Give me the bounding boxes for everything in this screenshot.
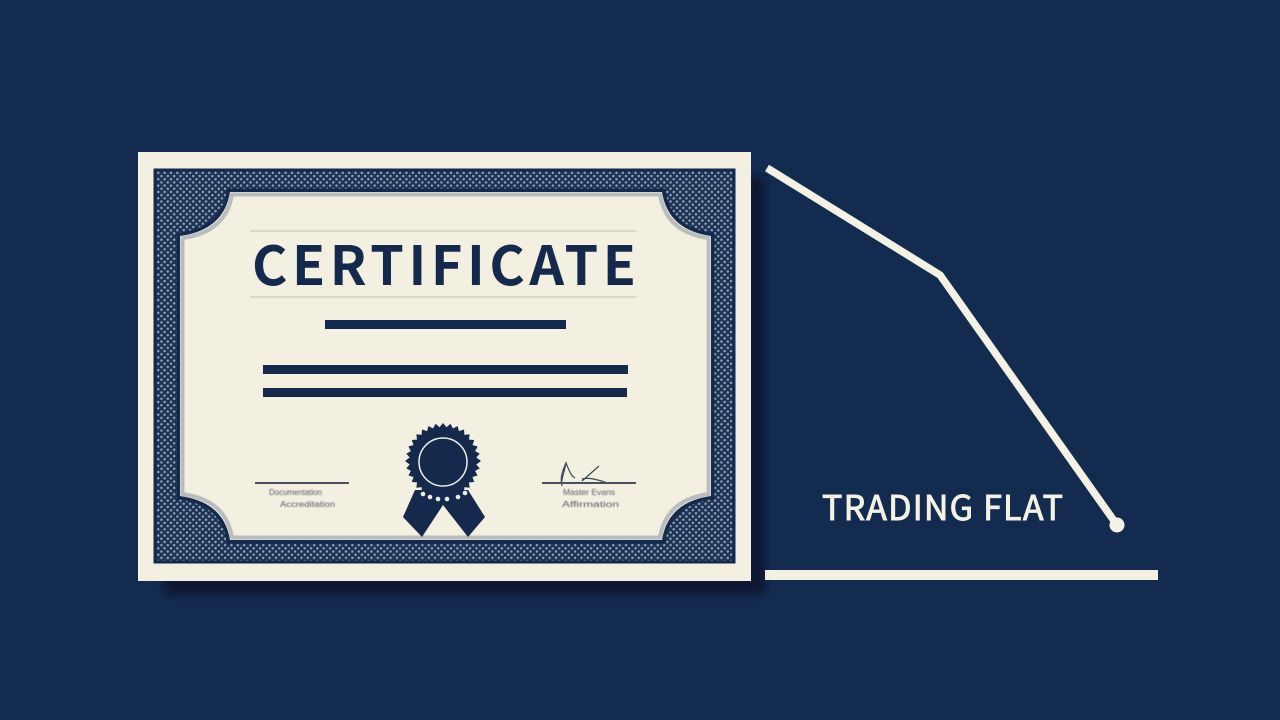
label: trading flat: TRADING FLAT — [822, 481, 1063, 530]
title rule top — [250, 230, 636, 232]
title: CERTIFICATE — [252, 222, 636, 301]
detail line 1 — [263, 365, 628, 374]
right signature block: Affirmation — [562, 500, 619, 509]
left signature block: Documentation — [269, 488, 322, 497]
detail line 2 — [263, 388, 627, 397]
certificate paper — [138, 152, 751, 581]
ribbon seal — [403, 423, 485, 537]
right signature block — [542, 463, 636, 509]
left signature block — [255, 482, 349, 509]
certificate — [138, 152, 751, 581]
right signature block: Master Evans — [563, 488, 615, 497]
flat baseline — [765, 570, 1158, 580]
chart: trading flat decline — [765, 168, 1158, 580]
name line — [325, 320, 566, 329]
certificate shadow — [165, 178, 765, 594]
seal inner ring — [419, 438, 467, 486]
seal rosette — [405, 423, 481, 499]
patterned border — [154, 169, 735, 563]
decline line — [767, 168, 1117, 525]
seal beads — [421, 491, 467, 501]
inner panel — [180, 192, 711, 540]
left signature block: Accreditation — [280, 500, 335, 509]
end point marker — [1110, 518, 1124, 532]
title rule bottom — [250, 296, 636, 298]
ribbon tails — [403, 490, 485, 537]
